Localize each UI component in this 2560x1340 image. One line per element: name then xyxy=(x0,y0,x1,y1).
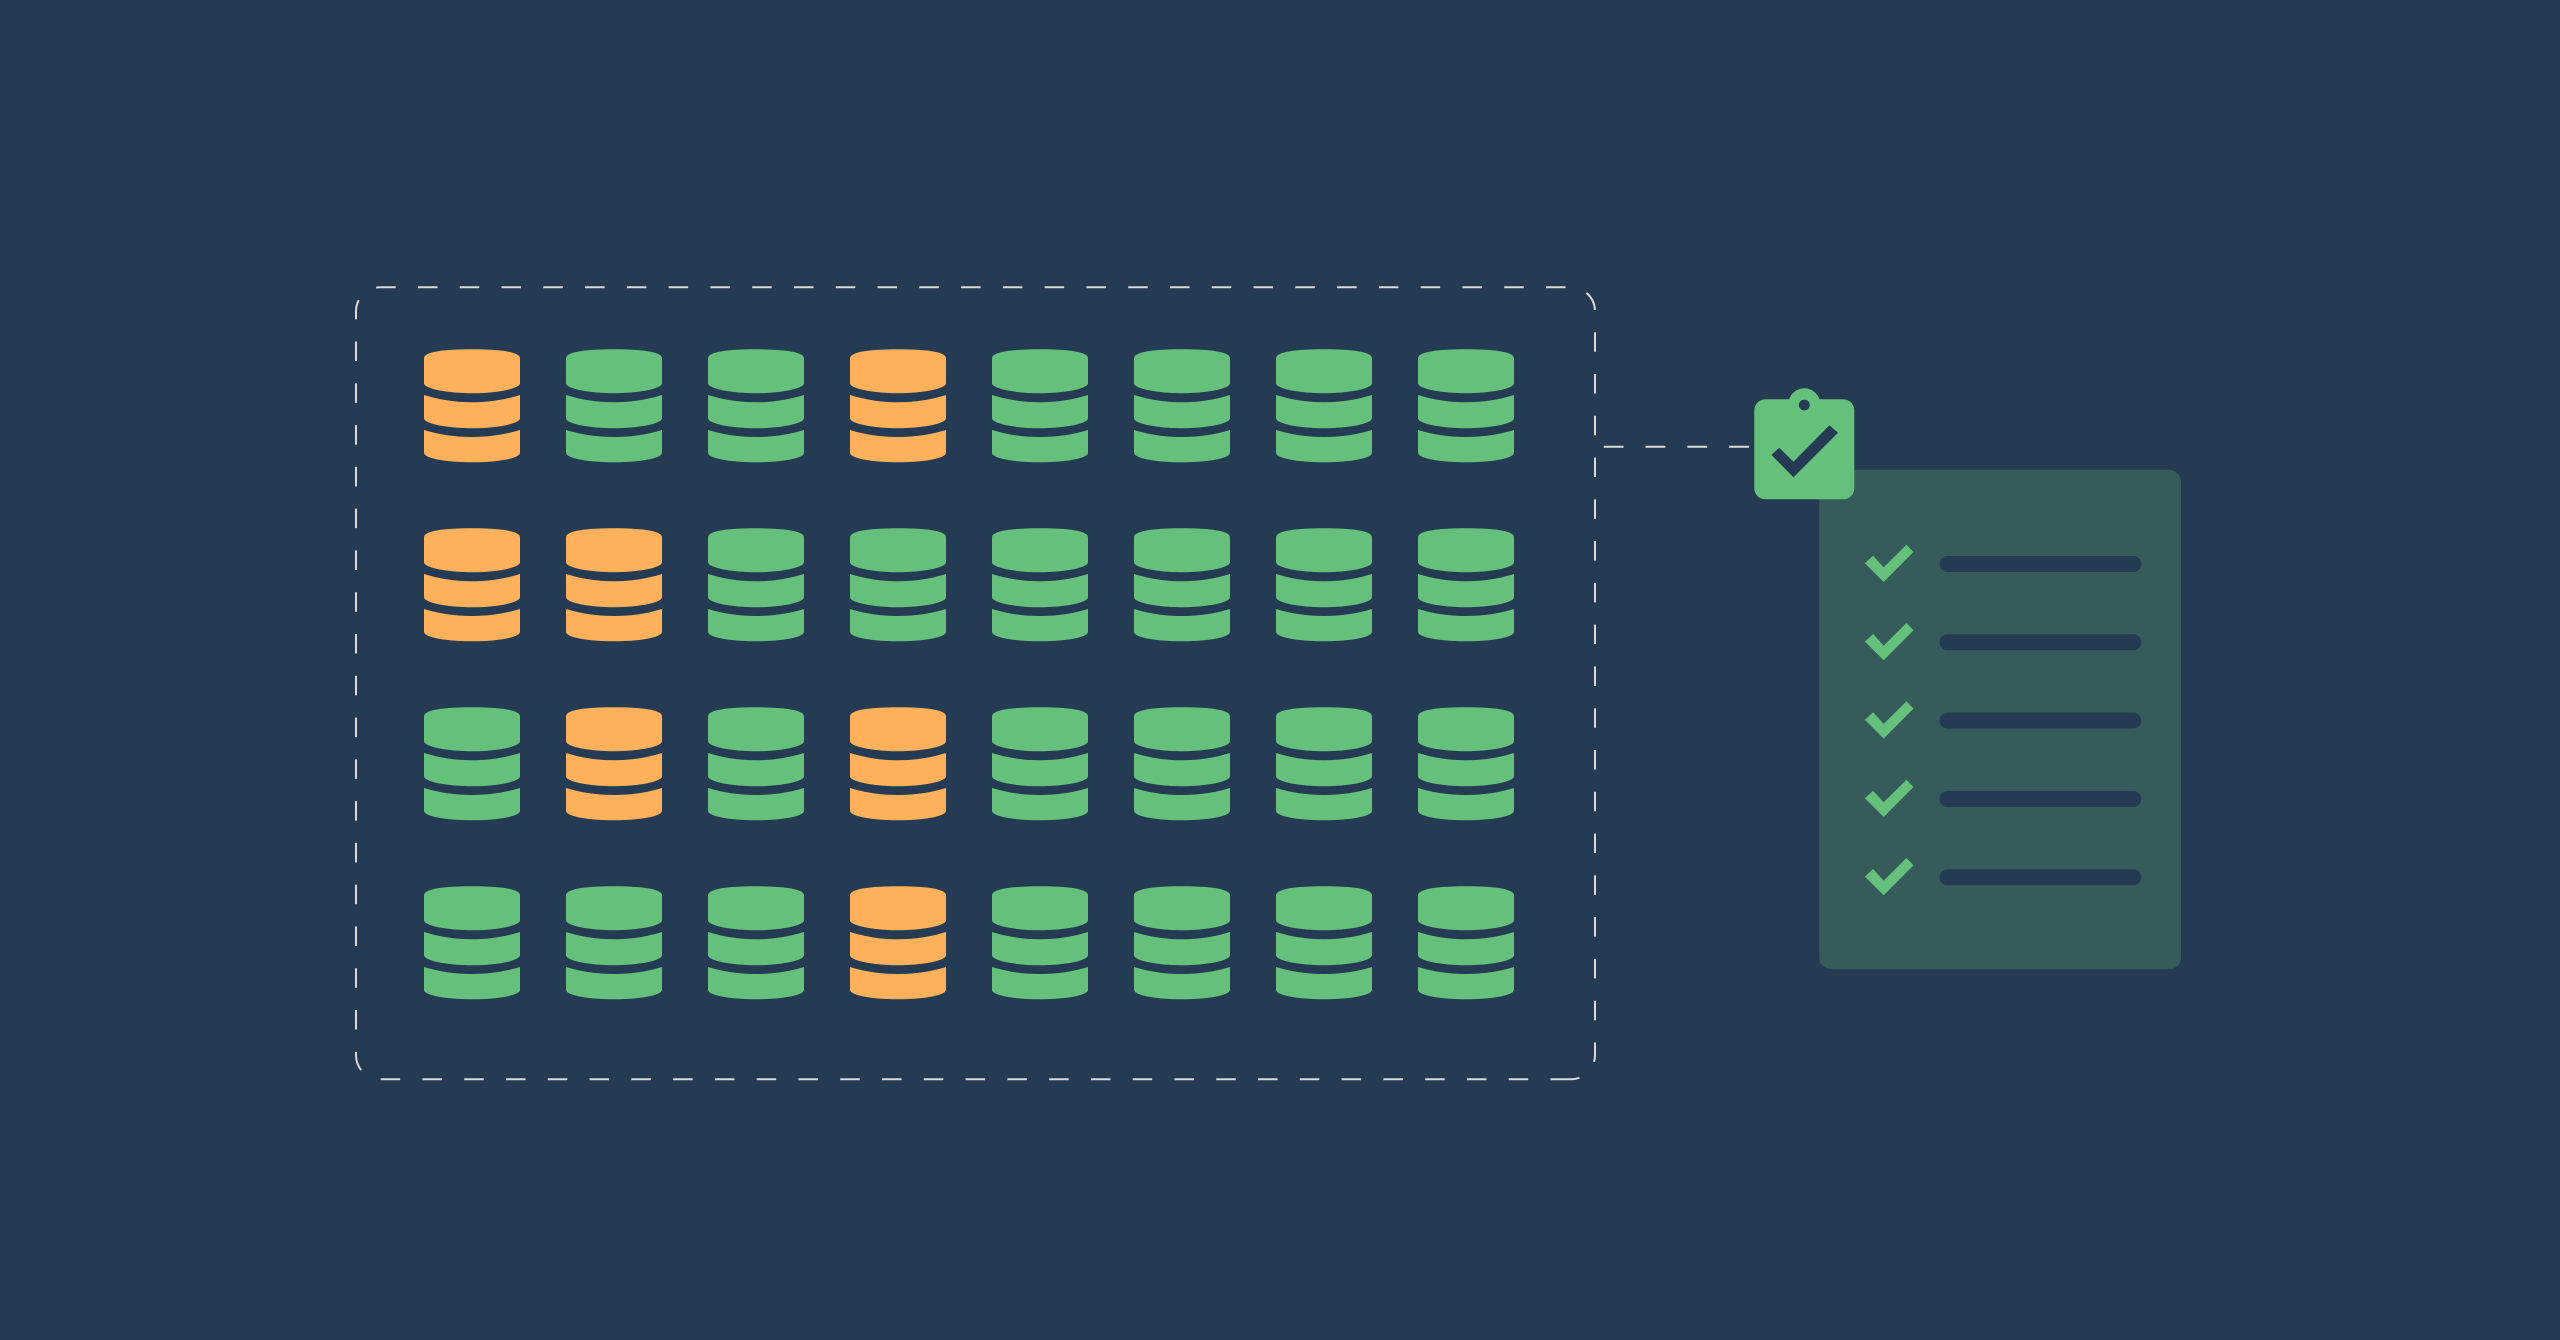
clip hole xyxy=(1799,400,1810,410)
icon: database flagged orange xyxy=(424,349,520,462)
icon: database green xyxy=(1418,349,1514,462)
checklist item 5 xyxy=(1865,858,2141,895)
icon: database green xyxy=(1134,349,1230,462)
icon: database green xyxy=(708,528,804,641)
checklist sheet xyxy=(1819,470,2181,969)
checklist item 1 xyxy=(1865,545,2141,582)
icon: check xyxy=(1865,701,1914,739)
clipboard check mark xyxy=(1771,425,1838,477)
icon: database green xyxy=(1276,528,1372,641)
icon: database green xyxy=(1134,528,1230,641)
dashed dataset frame xyxy=(356,287,1595,1079)
icon: database green xyxy=(992,349,1088,462)
icon: database flagged orange xyxy=(424,528,520,641)
icon: database green xyxy=(1276,349,1372,462)
row 3 of databases xyxy=(424,707,1514,820)
icon: database green xyxy=(1134,886,1230,999)
line placeholder xyxy=(1940,556,2141,572)
checklist item 3 xyxy=(1865,701,2141,739)
clipboard clip xyxy=(1788,388,1820,420)
checklist item 2 xyxy=(1865,623,2141,660)
icon: database green xyxy=(1276,886,1372,999)
icon: database green xyxy=(424,707,520,820)
icon: database green xyxy=(992,528,1088,641)
clipboard body xyxy=(1754,399,1854,499)
icon: database green xyxy=(992,707,1088,820)
icon: database green xyxy=(1418,886,1514,999)
icon: check xyxy=(1865,780,1914,817)
icon: database green xyxy=(992,886,1088,999)
icon: database green xyxy=(566,349,662,462)
icon: database green xyxy=(1418,707,1514,820)
row 4 of databases xyxy=(424,886,1514,999)
icon: database green xyxy=(1134,707,1230,820)
icon: database flagged orange xyxy=(850,349,946,462)
line placeholder xyxy=(1940,634,2141,650)
icon: database green xyxy=(850,528,946,641)
icon: check xyxy=(1865,545,1914,582)
icon: database green xyxy=(424,886,520,999)
icon: check xyxy=(1865,623,1914,660)
icon: database green xyxy=(708,707,804,820)
icon: database flagged orange xyxy=(566,707,662,820)
line placeholder xyxy=(1940,791,2141,807)
icon: database flagged orange xyxy=(850,707,946,820)
icon: database green xyxy=(566,886,662,999)
icon: check xyxy=(1865,858,1914,895)
dashed connector xyxy=(1604,446,1750,448)
icon: database flagged orange xyxy=(850,886,946,999)
checklist item 4 xyxy=(1865,780,2141,817)
row 2 of databases xyxy=(424,528,1514,641)
panel: checklist xyxy=(1819,470,2181,969)
icon: database green xyxy=(708,886,804,999)
icon: clipboard with check xyxy=(1754,388,1854,499)
database grid xyxy=(424,349,1514,999)
icon: database flagged orange xyxy=(566,528,662,641)
line placeholder xyxy=(1940,869,2141,885)
icon: database green xyxy=(708,349,804,462)
icon: database green xyxy=(1276,707,1372,820)
icon: database green xyxy=(1418,528,1514,641)
row 1 of databases xyxy=(424,349,1514,462)
line placeholder xyxy=(1940,713,2141,729)
